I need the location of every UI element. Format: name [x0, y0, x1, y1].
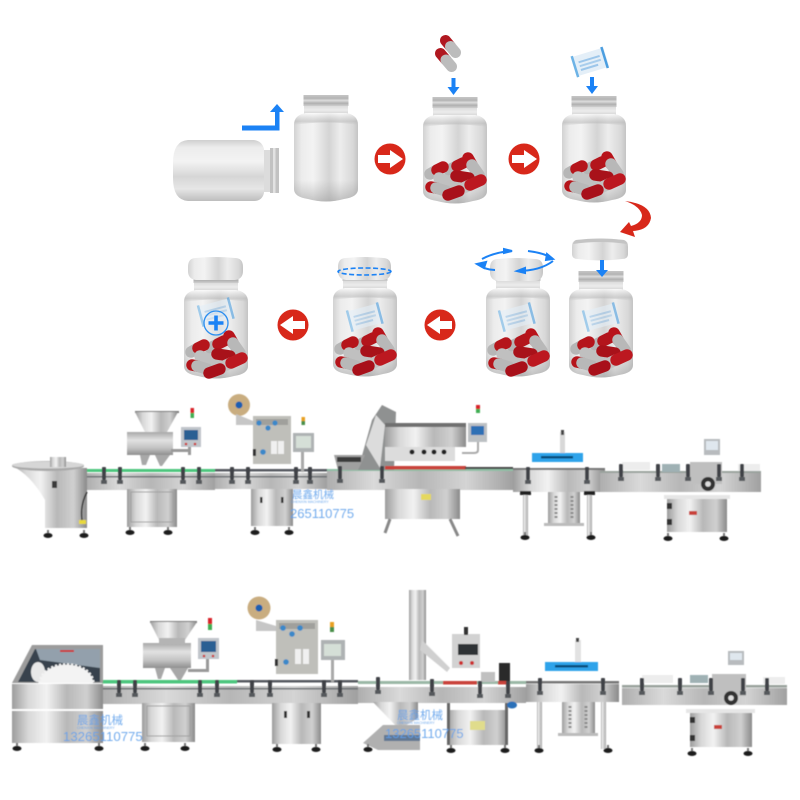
- line 2 capsule counter: [140, 618, 219, 751]
- icon: blue rotation arrows: [477, 249, 553, 273]
- line 2 labeller: [622, 651, 787, 756]
- arrow: blue down sachet: [586, 77, 598, 94]
- line 2 conveyor guide clips: [116, 677, 770, 698]
- line 1 capping machine: [334, 405, 513, 536]
- line 1 watermark: [290, 488, 354, 521]
- step 7: bottle with sealed cap: [333, 257, 397, 376]
- line 1 sachet dispenser: [228, 394, 314, 535]
- line 2 bottle unscrambler: [12, 645, 104, 751]
- arrow: red left 2: [278, 310, 308, 340]
- step 4: falling desiccant sachet: [571, 47, 609, 77]
- arrow: red curved: [620, 201, 651, 237]
- arrow: red left 1: [424, 310, 456, 340]
- line 1 conveyor guide clips: [101, 464, 745, 484]
- line 2 cap elevator: [363, 590, 450, 752]
- step 3: bottle with capsules: [423, 97, 487, 204]
- production line 2: [12, 590, 787, 756]
- line 2 watermark: 13265110775: [63, 729, 143, 744]
- production line 1: [12, 394, 761, 541]
- step 3: falling capsules: [440, 40, 456, 66]
- step 2: empty upright bottle: [294, 95, 358, 202]
- line 1 conveyor belt: [87, 469, 513, 490]
- line 1 induction sealer: [513, 430, 605, 540]
- step 6: bottle being screwed: [486, 258, 550, 376]
- step 5: bottle awaiting cap: [569, 271, 633, 378]
- line 1 watermark: CHENXIN MACHINERY: [291, 500, 329, 504]
- line 1 labeller: [600, 439, 761, 541]
- line 2 watermark: 晨鑫机械: [77, 713, 123, 727]
- arrow: red right 2: [508, 144, 540, 174]
- line 2 capping machine: [443, 627, 517, 753]
- step 4: bottle with capsules: [562, 96, 626, 202]
- line 1 capsule counter: [126, 408, 201, 535]
- step 1: bottle lying on side: [173, 140, 279, 201]
- line 2 watermark: [63, 708, 464, 744]
- line 2 watermark: CHENXIN MACHINERY: [77, 726, 115, 730]
- arrow: blue bottle turn up: [242, 104, 284, 130]
- line 2 watermark: CHENXIN MACHINERY: [397, 721, 435, 725]
- process diagram: bottle steps: [173, 40, 651, 378]
- step 5: floating cap: [572, 238, 628, 260]
- arrow: red right 1: [374, 144, 406, 174]
- line 2 conveyor belt: [102, 680, 526, 704]
- line 2 watermark: 13265110775: [385, 726, 464, 741]
- line 1 rotary table: [12, 457, 88, 538]
- arrow: blue down cap: [596, 260, 608, 277]
- step 8: finished bottle with safety seal: [184, 257, 248, 378]
- line 2 sachet dispenser: [248, 596, 345, 752]
- line 2 induction sealer: [526, 638, 619, 753]
- line 1 watermark: 265110775: [290, 506, 354, 521]
- line 2 watermark: 晨鑫机械: [397, 708, 443, 722]
- arrow: blue down capsules: [448, 78, 460, 95]
- line 1 watermark: 晨鑫机械: [292, 488, 334, 501]
